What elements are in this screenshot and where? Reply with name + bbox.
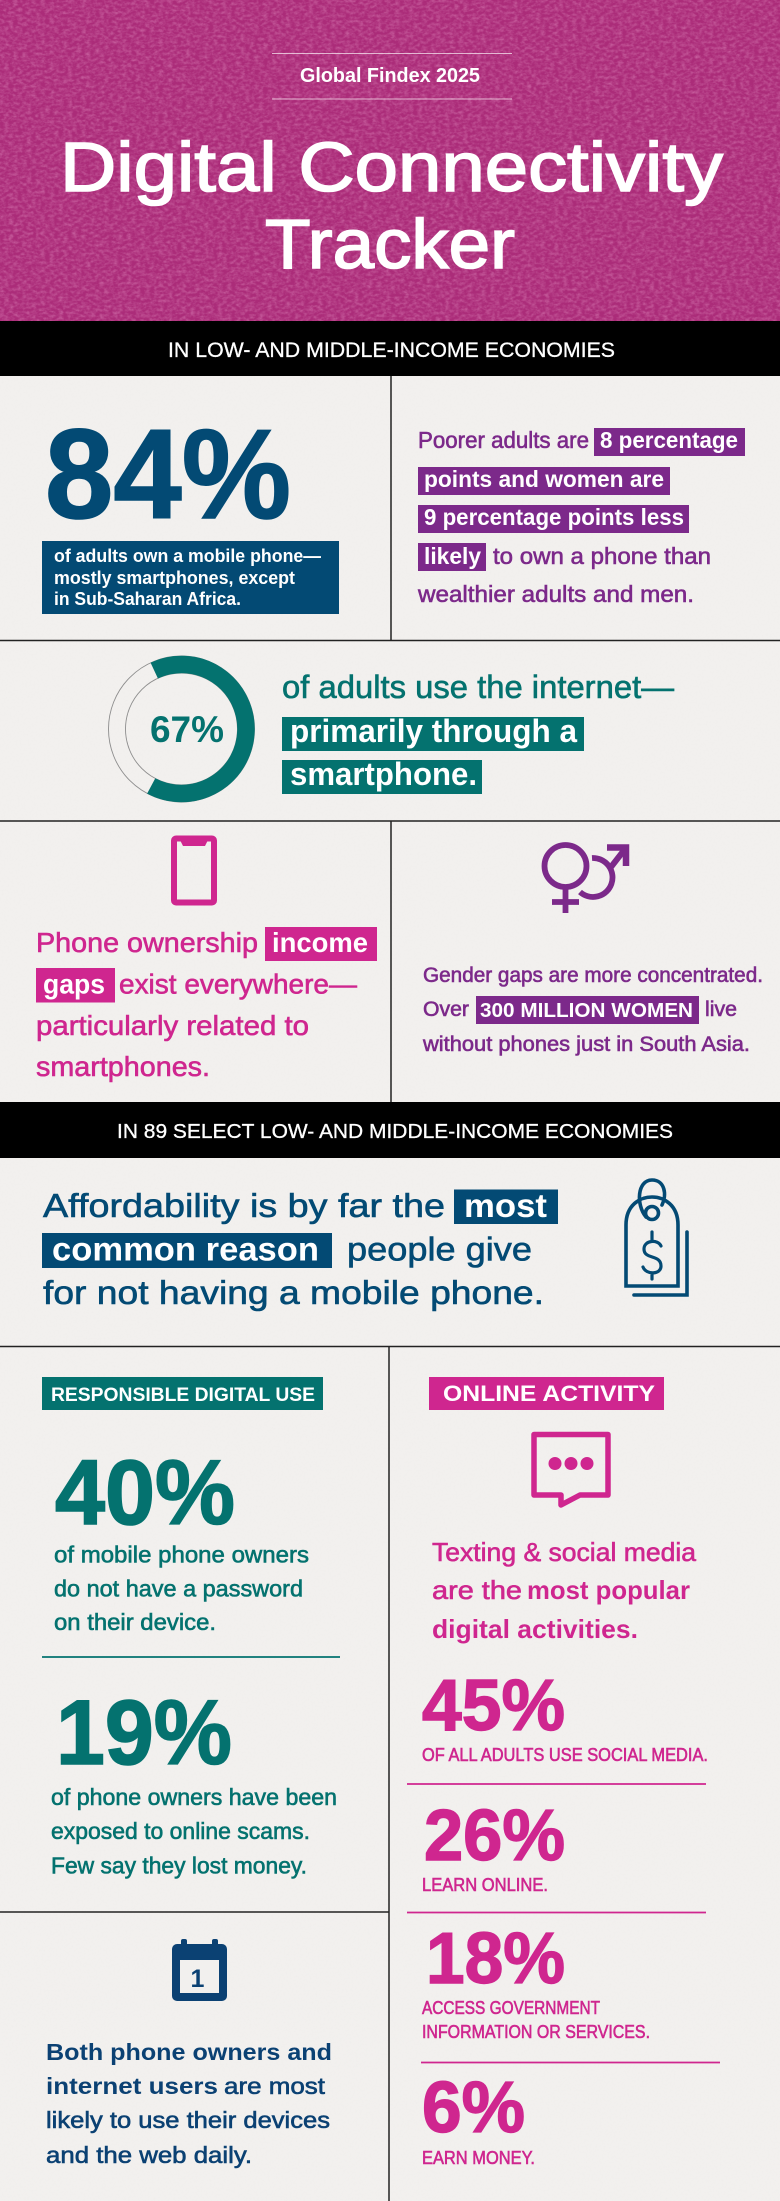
icon: chat bubble — [534, 1434, 608, 1505]
income gaps text: Phone ownership — [36, 927, 258, 958]
eyebrow: Global Findex 2025 — [300, 65, 480, 87]
panel: poorer adults and women: points and women are — [424, 466, 664, 492]
stat 40% — [54, 1442, 309, 1635]
internet text — [282, 669, 674, 794]
stat 26%: LEARN ONLINE. — [422, 1874, 548, 1895]
panel: income gaps — [36, 838, 377, 1082]
donut chart 67%: 67% — [150, 709, 224, 750]
internet text: of adults use the internet— — [282, 669, 674, 705]
income gaps text: smartphones. — [36, 1051, 210, 1082]
gender gaps text: Gender gaps are more concentrated. — [423, 964, 763, 987]
title: Digital Connectivity — [60, 128, 723, 206]
stat 40%: 40% — [55, 1442, 235, 1544]
daily use text: Both phone owners and — [46, 2039, 332, 2065]
stat caption box: in Sub-Saharan Africa. — [54, 588, 241, 609]
stat 84%: 84% — [45, 403, 291, 545]
daily use text: likely to use their devices — [46, 2107, 330, 2133]
stat 26%: 26% — [424, 1796, 565, 1876]
income gaps text: exist everywhere— — [119, 968, 357, 1000]
panel: internet use — [108, 656, 674, 802]
gender gaps text: live — [705, 998, 737, 1021]
stat 19%: of phone owners have been — [51, 1784, 337, 1810]
panel: affordability — [42, 1180, 687, 1311]
section label: RESPONSIBLE DIGITAL USE — [51, 1385, 315, 1406]
panel: poorer adults and women: likely — [424, 543, 481, 569]
stat 18%: 18% — [426, 1919, 565, 1999]
affordability text: for not having a mobile phone. — [43, 1274, 544, 1311]
section band 2 — [0, 1102, 780, 1158]
gender gaps text — [422, 964, 763, 1056]
stat 40%: on their device. — [54, 1609, 216, 1635]
stat caption box: mostly smartphones, except — [54, 567, 295, 588]
panel: poorer adults and women: 8 percentage — [600, 427, 738, 453]
income gaps text: income — [272, 927, 368, 958]
income gaps text: gaps — [43, 968, 105, 1000]
section band 1 — [0, 321, 780, 376]
panel: poorer adults and women — [417, 427, 745, 607]
income gaps text — [36, 927, 377, 1082]
icon: calendar: 1 — [190, 1965, 204, 1993]
stat 18%: INFORMATION OR SERVICES. — [422, 2021, 650, 2042]
internet text: primarily through a — [290, 713, 577, 749]
title — [60, 128, 723, 283]
panel: online activity — [407, 1377, 720, 2168]
online activity intro text — [432, 1537, 697, 1644]
gender gaps text: without phones just in South Asia. — [422, 1033, 750, 1056]
stat 19%: 19% — [56, 1682, 232, 1784]
panel: poorer adults and women: 9 percentage points less — [424, 504, 684, 530]
income gaps text: particularly related to — [36, 1010, 309, 1041]
stat 19%: exposed to online scams. — [51, 1818, 310, 1844]
icon: price tag — [626, 1180, 687, 1295]
affordability text: most — [464, 1187, 547, 1224]
panel: 84 percent own a phone — [42, 403, 339, 614]
affordability text: Affordability is by far the — [43, 1187, 445, 1224]
daily use text — [46, 2039, 332, 2168]
daily use text: are most — [224, 2073, 326, 2099]
section band 2: IN 89 SELECT LOW- AND MIDDLE-INCOME ECONOMIES — [117, 1121, 673, 1143]
stat caption box — [42, 541, 339, 614]
affordability text — [42, 1187, 558, 1311]
online activity intro text: digital activities. — [432, 1614, 638, 1644]
stat 18%: ACCESS GOVERNMENT — [422, 1997, 600, 2018]
panel: responsible digital use — [42, 1377, 340, 1878]
icon: calendar — [172, 1939, 227, 2001]
panel: poorer adults and women: Poorer adults are — [418, 427, 589, 453]
online activity intro text: most popular — [527, 1575, 690, 1605]
stat 45% — [422, 1666, 708, 1765]
section label — [429, 1377, 664, 1410]
icon: smartphone — [174, 838, 214, 902]
stat 6%: 6% — [422, 2068, 525, 2148]
icon: gender symbols — [544, 845, 626, 913]
stat 40%: of mobile phone owners — [54, 1542, 309, 1568]
section label: ONLINE ACTIVITY — [443, 1381, 655, 1406]
gender gaps text: 300 MILLION WOMEN — [480, 999, 693, 1022]
stat 45%: OF ALL ADULTS USE SOCIAL MEDIA. — [422, 1744, 708, 1765]
stat 19%: Few say they lost money. — [51, 1852, 307, 1878]
gender gaps text: Over — [423, 998, 469, 1021]
affordability text: common reason — [52, 1230, 319, 1268]
stat caption box: of adults own a mobile phone— — [54, 545, 321, 566]
panel: gender gaps — [422, 845, 763, 1056]
internet text: smartphone. — [290, 756, 477, 792]
online activity intro text: are the — [432, 1575, 522, 1605]
stat 6%: EARN MONEY. — [422, 2147, 535, 2168]
section band 1: IN LOW- AND MIDDLE-INCOME ECONOMIES — [168, 339, 615, 362]
affordability text: people give — [347, 1230, 532, 1268]
title: Tracker — [265, 205, 515, 283]
online activity intro text: Texting & social media — [432, 1537, 697, 1567]
stat 40%: do not have a password — [54, 1576, 303, 1602]
panel: daily use — [46, 1939, 332, 2168]
stat 19% — [51, 1682, 337, 1878]
panel: poorer adults and women: to own a phone than — [493, 543, 711, 569]
stat 45%: 45% — [422, 1666, 565, 1746]
daily use text: internet users — [46, 2073, 218, 2099]
panel: poorer adults and women: wealthier adults and men. — [417, 581, 694, 607]
daily use text: and the web daily. — [46, 2142, 252, 2168]
header banner — [0, 0, 780, 321]
stat 18% — [422, 1919, 650, 2042]
donut chart 67% — [108, 656, 254, 802]
section label — [42, 1377, 323, 1410]
